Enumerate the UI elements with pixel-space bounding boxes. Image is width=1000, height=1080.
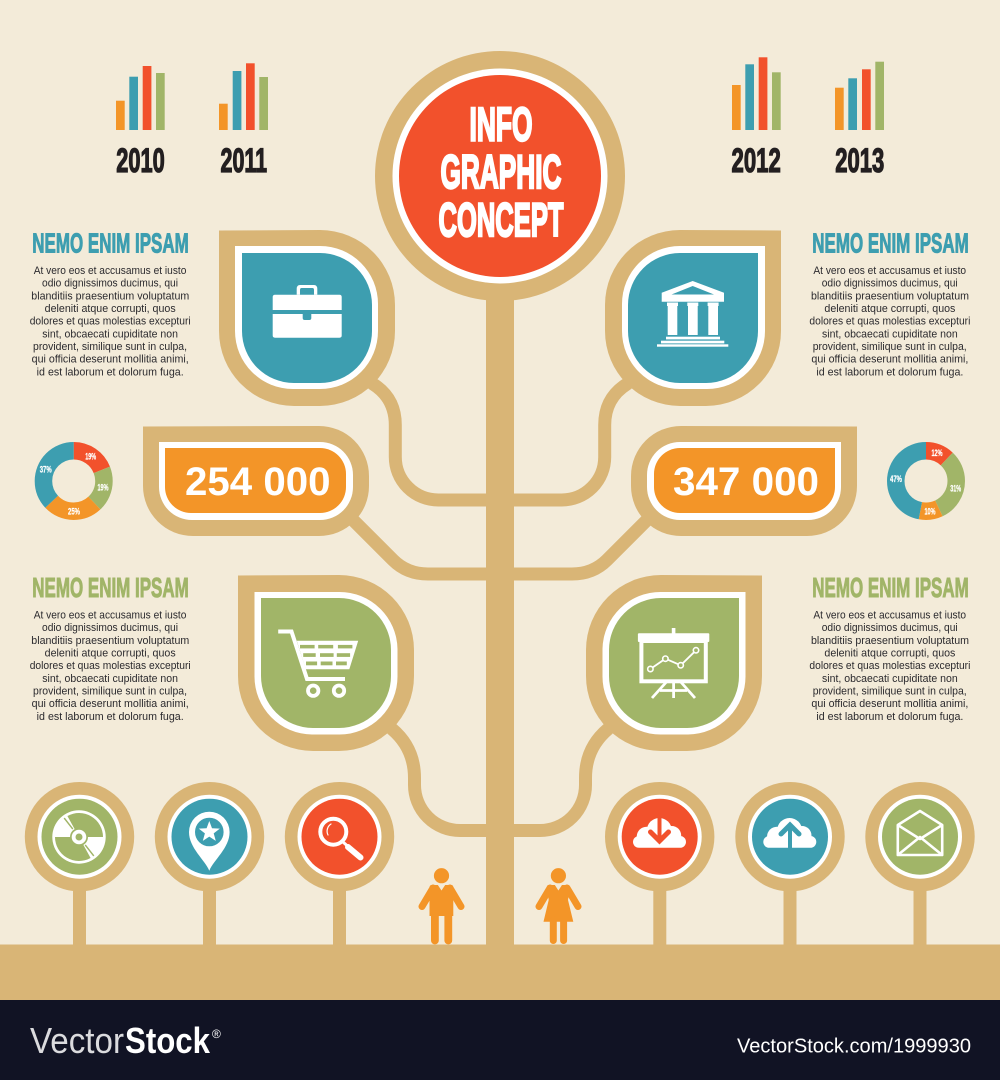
text block: top right: blanditiis praesentium voluptatum (811, 290, 969, 302)
text block: top left (30, 228, 191, 378)
text block: bottom right: odio dignissimos ducimus, qui (822, 622, 958, 634)
text block: bottom right: blanditiis praesentium voluptatum (811, 635, 969, 647)
text block: bottom left: odio dignissimos ducimus, qui (42, 622, 178, 634)
text block: top right: odio dignissimos ducimus, qui (822, 278, 958, 290)
donut chart right: 10% (924, 506, 936, 518)
footer logo: ® (212, 1027, 221, 1041)
icon: cloud download (633, 818, 686, 848)
number panel: 254 000: 254 000 (185, 460, 330, 504)
text block: bottom right (809, 572, 970, 723)
bar chart 2010: 2010 (116, 142, 165, 180)
badge: cloud download (605, 782, 714, 946)
bar chart 2012: 2012 (732, 142, 781, 180)
text block: bottom right: sint, obcaecati cupiditate non (822, 673, 958, 685)
icon: map pin (189, 812, 230, 871)
text block: bottom left (30, 572, 191, 723)
footer logo: Stock (125, 1020, 211, 1061)
text block: top right: qui officia deserunt mollitia animi, (811, 354, 968, 366)
donut chart right (890, 448, 962, 518)
figure: man (422, 868, 461, 940)
footer logo: Vector (30, 1020, 124, 1061)
leaf panel: briefcase (219, 230, 395, 406)
leaf panel: presentation board (586, 575, 762, 751)
figure: woman (539, 868, 578, 940)
leaf panel: shopping cart (238, 575, 414, 751)
text block: top right: deleniti atque corrupti, quos (824, 303, 955, 315)
badge: map pin (155, 782, 264, 946)
text block: bottom left: NEMO ENIM IPSAM (32, 572, 189, 603)
title text: INFO (470, 98, 532, 150)
badge: search (285, 782, 394, 946)
icon: open envelope (898, 811, 942, 855)
text block: bottom right: qui officia deserunt mollitia animi, (811, 698, 968, 710)
donut chart left: 19% (85, 452, 97, 462)
bar chart 2010 (116, 66, 165, 180)
donut chart left: 37% (40, 464, 52, 476)
footer logo (30, 1020, 221, 1061)
text block: top left: dolores et quas molestias excepturi (30, 316, 191, 328)
bar chart 2011 (219, 63, 268, 180)
badge: cloud upload (735, 782, 845, 946)
title text: GRAPHIC (440, 145, 562, 198)
text block: top right: sint, obcaecati cupiditate non (822, 328, 958, 340)
footer bar (0, 1000, 1000, 1080)
text block: bottom left: dolores et quas molestias excepturi (30, 660, 191, 672)
text block: top left: qui officia deserunt mollitia animi, (32, 354, 189, 366)
text block: bottom left: provident, similique sunt in culpa, (33, 686, 187, 698)
title circle (375, 51, 625, 301)
text block: bottom left: blanditiis praesentium voluptatum (31, 635, 189, 647)
text block: bottom right: dolores et quas molestias excepturi (809, 660, 970, 672)
donut chart left: 25% (68, 506, 80, 518)
text block: bottom left: id est laborum et dolorum fuga. (37, 711, 184, 723)
number panel: 347 000 (631, 426, 857, 536)
badge: disc (25, 782, 134, 946)
text block: top right: At vero eos et accusamus et iusto (813, 265, 966, 277)
text block: top right: id est laborum et dolorum fuga. (816, 366, 963, 378)
footer url: VectorStock.com/1999930 (737, 1036, 971, 1058)
icon: magnifier (320, 819, 360, 858)
text block: bottom left: deleniti atque corrupti, quos (45, 648, 176, 660)
text block: top left: NEMO ENIM IPSAM (32, 228, 189, 258)
text block: bottom right: deleniti atque corrupti, quos (824, 648, 955, 660)
icon: disc (52, 810, 106, 864)
icon: cloud upload (763, 818, 816, 848)
bar chart 2012 (732, 57, 781, 180)
text block: top left: odio dignissimos ducimus, qui (42, 278, 178, 290)
leaf panel: bank (605, 230, 781, 406)
text block: top left: At vero eos et accusamus et iusto (34, 265, 187, 277)
text block: top left: deleniti atque corrupti, quos (45, 303, 176, 315)
ground strip (0, 944, 1000, 1000)
text block: top right (809, 228, 970, 378)
donut chart right: 12% (932, 448, 943, 459)
text block: top left: sint, obcaecati cupiditate non (42, 328, 178, 340)
text block: bottom right: At vero eos et accusamus et iusto (813, 610, 966, 622)
text block: top left: id est laborum et dolorum fuga. (37, 366, 184, 378)
icon: briefcase (273, 285, 342, 338)
tree trunk and branches (345, 290, 655, 950)
bar chart 2013 (835, 62, 884, 180)
bar chart 2011: 2011 (220, 142, 267, 180)
donut chart left (40, 451, 109, 518)
text block: top right: provident, similique sunt in culpa, (813, 341, 967, 353)
text block: bottom left: qui officia deserunt mollitia animi, (32, 698, 189, 710)
text block: bottom right: provident, similique sunt in culpa, (813, 686, 967, 698)
badge: mail (865, 782, 975, 946)
icon: presentation board (638, 628, 709, 698)
donut chart right: 31% (950, 484, 962, 494)
number panel: 254 000 (143, 426, 369, 536)
text block: top left: blanditiis praesentium voluptatum (31, 290, 189, 302)
text block: top right: dolores et quas molestias excepturi (809, 316, 970, 328)
text block: top left: provident, similique sunt in culpa, (33, 341, 187, 353)
donut chart left: 19% (98, 482, 109, 494)
icon: bank (657, 281, 728, 347)
text block: bottom left: sint, obcaecati cupiditate non (42, 673, 178, 685)
text block: bottom right: id est laborum et dolorum fuga. (816, 711, 963, 723)
text block: bottom left: At vero eos et accusamus et iusto (34, 610, 187, 622)
icon: shopping cart (278, 632, 358, 696)
title text: CONCEPT (438, 193, 564, 246)
title text (438, 98, 564, 246)
donut chart right: 47% (890, 474, 902, 485)
bar chart 2013: 2013 (835, 142, 884, 180)
number panel: 347 000: 347 000 (673, 460, 819, 504)
